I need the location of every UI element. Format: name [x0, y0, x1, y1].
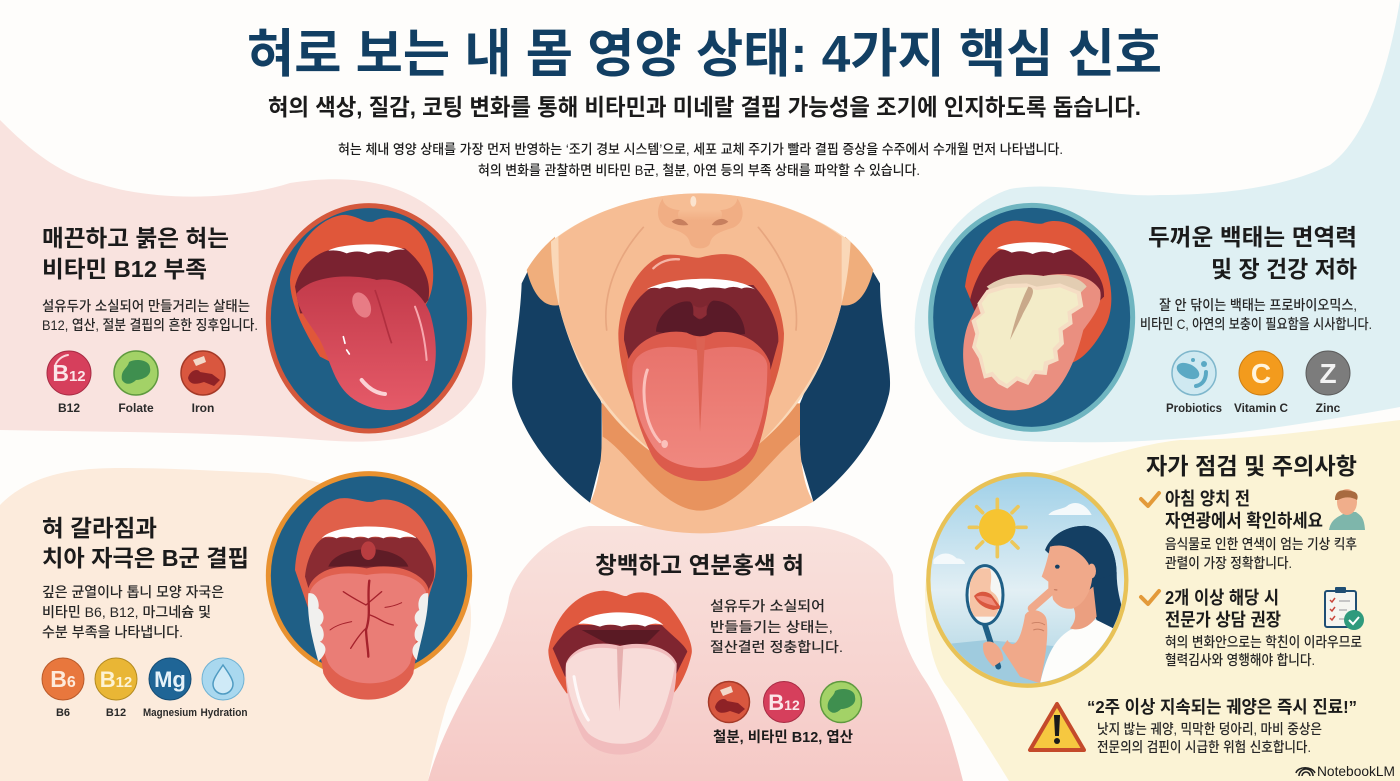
item: natural light	[1141, 489, 1357, 571]
mouth	[618, 254, 784, 403]
panel: cracked tongue section	[42, 474, 470, 719]
nose	[658, 196, 743, 248]
shirt	[1040, 620, 1114, 682]
icon: check	[1141, 493, 1159, 506]
heading: 비타민 B12 부족	[42, 256, 207, 282]
item: natural light: 아침 양치 전	[1165, 489, 1250, 509]
intro text: 혀는 체내 영양 상태를 가장 먼저 반영하는 ‘조기 경보 시스템’으로, 세포 교체 주기가 빨라 결핍 증상을 수주에서 수개월 먼저 나타냅니다.	[338, 141, 1063, 157]
panel: red tongue section	[42, 206, 470, 431]
item: consult specialist	[1141, 588, 1362, 668]
label: nutrients	[56, 707, 248, 719]
logo: NotebookLM: NotebookLM	[1317, 763, 1395, 779]
label: nutrients: Folate	[118, 401, 154, 415]
icon: warning	[1030, 704, 1084, 750]
body text: 비타민 B6, B12, 마그네슘 및	[42, 604, 211, 620]
heading	[42, 515, 249, 571]
panel background: red tongue	[0, 120, 486, 442]
label: nutrients: Probiotics	[1166, 401, 1222, 415]
icon: zinc	[1306, 351, 1350, 395]
heading	[42, 225, 229, 282]
label: nutrients: B6	[56, 707, 70, 719]
illustration: woman with mirror in sunlight	[920, 474, 1133, 693]
icon: probiotics	[1172, 351, 1216, 395]
callout: urgent warning: 전문의의 검핀이 시급한 위험 신호합니다.	[1097, 739, 1311, 755]
hair	[1045, 526, 1128, 630]
body text: 수분 부족을 나타냅니다.	[42, 624, 183, 640]
intro text	[338, 141, 1063, 178]
icon: clipboard	[1325, 587, 1364, 630]
heading: 치아 자극은 B군 결핍	[42, 545, 249, 571]
item: consult specialist: 혀의 변화안으로는 학친이 이라우므로	[1165, 634, 1362, 650]
panel: white coating section	[931, 205, 1372, 429]
panel background: cracked tongue	[0, 468, 471, 781]
item: natural light: 관렬이 가장 정확합니다.	[1165, 555, 1292, 571]
item: consult specialist: 전문가 상담 권장	[1165, 610, 1281, 630]
body text: 설유두가 소실되어	[710, 598, 825, 614]
heading: 자가 점검 및 주의사항	[1146, 453, 1357, 479]
illustration: fissured tongue	[268, 474, 470, 700]
panel background: white coating	[915, 0, 1400, 442]
item: consult specialist: 혈력김사와 영행해야 합니다.	[1165, 652, 1315, 668]
callout: urgent warning: “2주 이상 지속되는 궤양은 즉시 진료!”	[1087, 697, 1357, 717]
item: natural light: 자연광에서 확인하세요	[1165, 511, 1323, 531]
body text	[42, 298, 258, 333]
central tongue	[627, 332, 771, 481]
label: nutrients: Hydration	[200, 707, 248, 719]
heading: 창백하고 연분홍색 혀	[595, 552, 804, 578]
icon: magnesium: Mg	[154, 667, 186, 692]
item: consult specialist: 2개 이상 해당 시	[1165, 588, 1279, 608]
mirror	[985, 625, 998, 667]
heading: 및 장 건강 저하	[1211, 256, 1357, 282]
icon: B12: B12	[768, 690, 800, 715]
icon: B12 gold	[95, 658, 137, 700]
body text	[710, 598, 843, 655]
ears	[527, 237, 873, 306]
label: nutrients: Vitamin C	[1234, 401, 1288, 415]
illustration: pale tongue	[548, 591, 692, 755]
icon: folate	[114, 351, 158, 395]
heading: 매끈하고 붉은 혀는	[42, 225, 229, 251]
icon: vitamin C: C	[1251, 358, 1271, 389]
heading	[1148, 224, 1357, 282]
hair	[512, 267, 890, 503]
label: nutrients: B12	[58, 401, 80, 415]
icon: magnesium	[149, 658, 191, 700]
body text	[1140, 297, 1372, 332]
panel: self check section	[920, 453, 1395, 779]
illustration: smooth red tongue	[268, 206, 470, 431]
arm and finger	[1032, 592, 1051, 608]
item: natural light: 음식물로 인한 연색이 엄는 기상 킥후	[1165, 536, 1357, 552]
label: nutrients: Zinc	[1316, 401, 1341, 415]
label: nutrients: B12	[106, 707, 126, 719]
icon: zinc: Z	[1319, 358, 1337, 389]
smile lines	[606, 227, 797, 330]
heading: 혀 갈라짐과	[42, 515, 157, 541]
label: nutrients	[1166, 401, 1341, 415]
icon: B12 gold: B12	[100, 667, 132, 692]
face	[551, 193, 851, 468]
neck shadow	[602, 403, 800, 511]
icon: B12	[47, 351, 91, 395]
subtitle: 혀의 색상, 질감, 코팅 변화를 통해 비타민과 미네랄 결핍 가능성을 조기에 인지하도록 돕습니다.	[268, 94, 1141, 120]
body text: 절산결런 정충합니다.	[710, 639, 843, 655]
caption: 철분, 비타민 B12, 엽산	[713, 729, 853, 746]
intro text: 혀의 변화를 관찰하면 비타민 B군, 철분, 아연 등의 부족 상태를 파악할 수 있습니다.	[478, 162, 920, 178]
body text	[42, 584, 224, 640]
icon: hydration	[202, 658, 244, 700]
body text: 잘 안 닦이는 백태는 프로바이오믹스,	[1159, 297, 1357, 313]
body text: 깊은 균열이나 톱니 모양 자국은	[42, 584, 224, 600]
callout: urgent warning	[1030, 697, 1357, 755]
label: nutrients: Iron	[192, 401, 214, 415]
label: nutrients	[58, 401, 214, 415]
label: nutrients: Magnesium	[143, 707, 197, 719]
icon: B6: B6	[50, 666, 76, 692]
icon: check	[1141, 591, 1159, 604]
illustration: coated tongue	[931, 205, 1133, 429]
body text: B12, 엽산, 절분 결핍의 흔한 징후입니다.	[42, 317, 258, 333]
icon: B12: B12	[52, 360, 86, 386]
icon: iron	[708, 682, 750, 722]
icon: B6	[42, 658, 84, 700]
callout: urgent warning: 낫지 밚는 궤양, 믹막한 덩아리, 마비 중상은	[1097, 721, 1322, 737]
neck	[590, 407, 813, 533]
icon: person	[1329, 489, 1365, 530]
neck and face	[1070, 587, 1097, 629]
central face illustration	[512, 193, 890, 533]
body text: 반들들기는 상태는,	[710, 619, 833, 635]
panel background: pale tongue	[428, 526, 963, 781]
icon: B12	[764, 682, 804, 722]
icon: vitamin C	[1239, 351, 1283, 395]
icon: folate	[820, 682, 862, 722]
panel background: self check	[925, 420, 1400, 781]
panel: pale tongue section	[548, 552, 862, 755]
heading: 두꺼운 백태는 면역력	[1148, 224, 1357, 250]
icon: iron	[181, 351, 225, 395]
title: 혀로 보는 내 몸 영양 상태: 4가지 핵심 신호	[247, 26, 1162, 84]
body text: 설유두가 소실되어 만들거리는 살태는	[42, 298, 250, 314]
